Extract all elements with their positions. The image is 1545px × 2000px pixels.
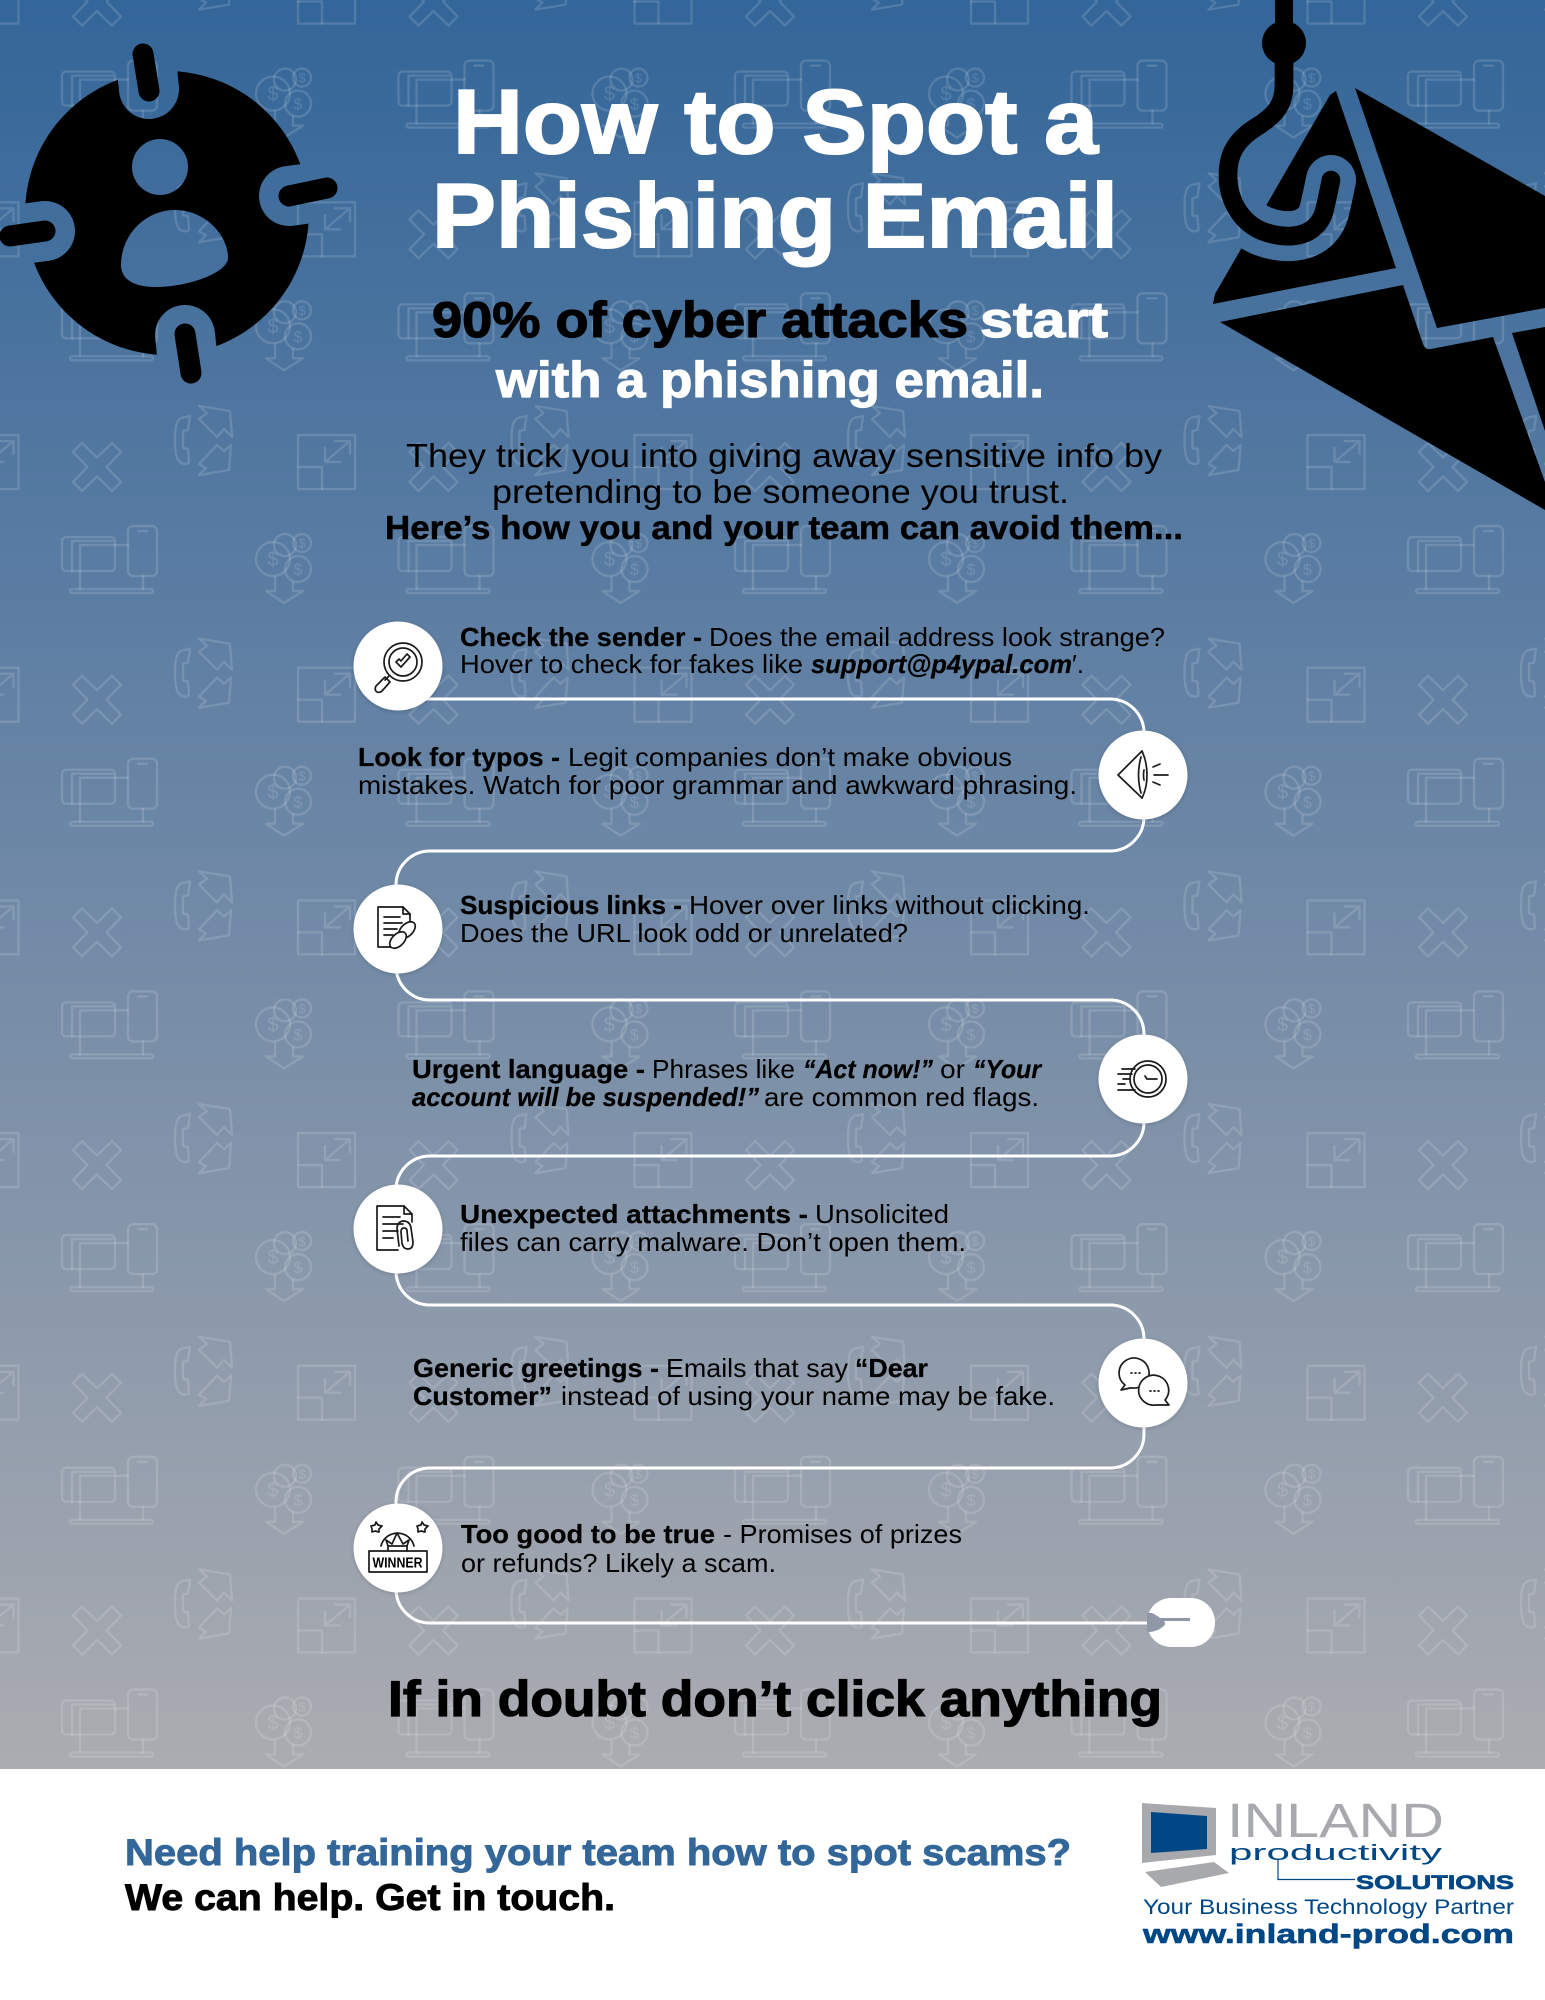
icon: magnifying glass with check (354, 622, 442, 710)
footer call to action (125, 1832, 1071, 1918)
icon: chat bubbles (1098, 1338, 1188, 1428)
icon: document with paperclip (354, 1184, 442, 1274)
title: How to Spot a (453, 72, 1099, 173)
text: look for typos (358, 742, 1077, 800)
text: urgent language: Urgent language - (412, 1054, 645, 1084)
text: generic greetings: Customer” (413, 1381, 552, 1411)
icon: document with chain link (354, 884, 442, 974)
icon: target on person (0, 44, 338, 384)
step 7: too good to be true (354, 1504, 962, 1592)
text: urgent language (412, 1054, 1043, 1112)
subheading: 90% statistic: start (980, 292, 1108, 348)
intro paragraph: pretending to be someone you trust. (492, 473, 1069, 510)
text: suspicious links: Hover over links without clicking. (689, 890, 1090, 920)
footer call to action: We can help. Get in touch. (125, 1877, 615, 1918)
text: urgent language: are common red flags. (764, 1082, 1039, 1112)
title: Phishing Email (432, 166, 1118, 267)
text: generic greetings: “Dear (855, 1353, 928, 1383)
subheading: 90% statistic: 90% of cyber attacks (432, 292, 968, 348)
title (432, 72, 1118, 267)
text: check the sender (460, 622, 1165, 679)
text: suspicious links: Suspicious links - (460, 890, 682, 920)
text: urgent language: Phrases like (652, 1054, 795, 1084)
step 2: look for typos (358, 730, 1188, 820)
text: unexpected attachments: files can carry malware. Don’t open them. (460, 1227, 966, 1257)
icon: winner badge with crown: WINNER (372, 1556, 423, 1572)
text: check the sender: Check the sender - (460, 622, 702, 652)
text: check the sender: ′. (1072, 649, 1084, 679)
text: too good to be true: - Promises of prizes (723, 1519, 962, 1549)
icon: winner badge with crown (354, 1504, 442, 1592)
text: unexpected attachments (460, 1199, 966, 1257)
subheading: 90% statistic (432, 292, 1108, 408)
step 6: generic greetings (413, 1338, 1188, 1428)
logo: Inland Productivity Solutions: SOLUTIONS (1356, 1872, 1514, 1894)
text: unexpected attachments: Unsolicited (815, 1199, 949, 1229)
text: too good to be true: or refunds? Likely a scam. (461, 1548, 776, 1578)
step 3: suspicious links (354, 884, 1090, 974)
text: suspicious links: Does the URL look odd or unrelated? (460, 918, 908, 948)
text: urgent language: “Your (973, 1054, 1043, 1084)
logo: Inland Productivity Solutions: productivity (1229, 1840, 1442, 1865)
icon: computer monitor and keyboard (1142, 1803, 1229, 1887)
closing message: If in doubt don’t click anything (388, 1671, 1162, 1727)
text: generic greetings: Generic greetings - (413, 1353, 659, 1383)
icon: eye (1098, 730, 1188, 820)
footer call to action: Need help training your team how to spot scams? (125, 1832, 1071, 1873)
intro paragraph (385, 437, 1183, 546)
text: urgent language: account will be suspended!” (412, 1082, 759, 1112)
text: look for typos: Legit companies don’t make obvious (568, 742, 1012, 772)
text: too good to be true: Too good to be true (461, 1519, 715, 1549)
text: suspicious links (460, 890, 1090, 948)
text: too good to be true (461, 1519, 962, 1578)
logo: Inland Productivity Solutions: Your Business Technology Partner (1143, 1896, 1514, 1919)
text: urgent language: or (940, 1054, 965, 1084)
winding connector line (396, 699, 1155, 1623)
footer panel (0, 1769, 1545, 2000)
text: generic greetings (413, 1353, 1055, 1411)
logo: Inland Productivity Solutions: INLAND (1227, 1795, 1444, 1848)
subheading: 90% statistic: with a phishing email. (495, 352, 1044, 408)
icon: fishing hook and envelope (1213, 0, 1545, 510)
step 5: unexpected attachments (354, 1184, 966, 1274)
text: check the sender: support@p4ypal.com (811, 649, 1072, 679)
text: generic greetings: Emails that say (666, 1353, 848, 1383)
intro paragraph: They trick you into giving away sensitive info by (406, 437, 1163, 474)
text: generic greetings: instead of using your name may be fake. (561, 1381, 1055, 1411)
step 4: urgent language (412, 1034, 1188, 1124)
logo: Inland Productivity Solutions: www.inland-prod.com (1142, 1919, 1514, 1949)
text: look for typos: mistakes. Watch for poor grammar and awkward phrasing. (358, 770, 1077, 800)
text: unexpected attachments: Unexpected attachments - (460, 1199, 808, 1229)
intro paragraph: Here’s how you and your team can avoid them... (385, 509, 1183, 546)
text: urgent language: “Act now!” (803, 1054, 933, 1084)
text: check the sender: Does the email address look strange? (709, 622, 1165, 652)
icon: computer mouse end cap (1147, 1598, 1215, 1647)
step 1: check the sender (354, 622, 1165, 710)
text: look for typos: Look for typos - (358, 742, 560, 772)
icon: speeding clock (1098, 1034, 1188, 1124)
logo: Inland Productivity Solutions (1142, 1795, 1514, 1949)
text: check the sender: Hover to check for fakes like (460, 649, 803, 679)
